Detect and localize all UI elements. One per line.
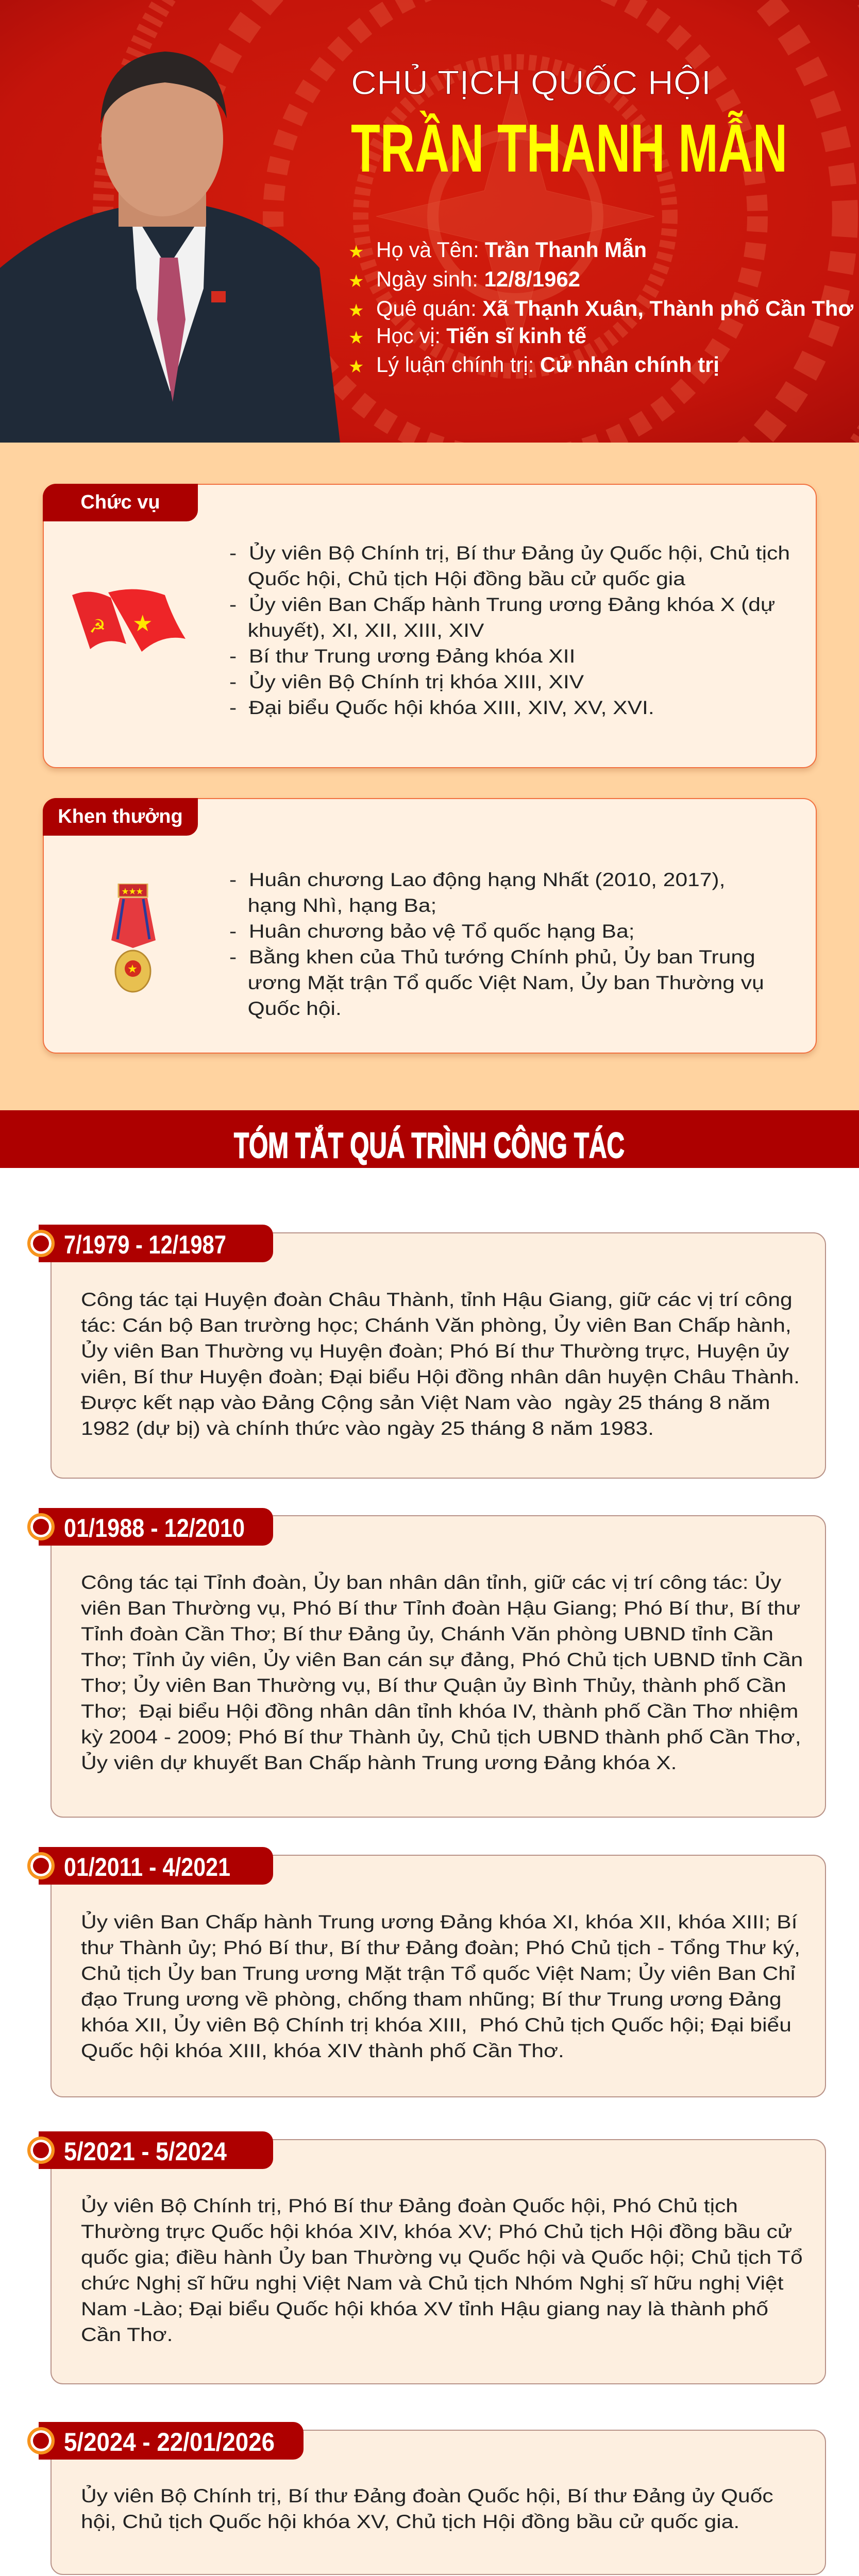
card: 5/2021 - 5/2024: quốc gia; điều hành Ủy ban Thường vụ Quốc hội và Quốc hội; Chủ tịch Tổ bbox=[81, 2247, 803, 2268]
card: 7/1979 - 12/1987: 7/1979 - 12/1987 bbox=[64, 1230, 226, 1259]
info list with stars: Ngày sinh: 12/8/1962 bbox=[376, 267, 580, 291]
card: 5/2024 - 22/01/2026: 5/2024 - 22/01/2026 bbox=[64, 2428, 275, 2456]
list: khen thưởng: hạng Nhì, hạng Ba; bbox=[248, 895, 436, 916]
section heading banner bbox=[0, 1110, 859, 1168]
card: 01/2011 - 4/2021: Ủy viên Ban Chấp hành Trung ương Đảng khóa XI, khóa XII, khóa XIII; Bí bbox=[81, 1911, 797, 1933]
list: khen thưởng: - Huân chương bảo vệ Tổ quốc hạng Ba; bbox=[229, 921, 635, 942]
icon: flags: ☭ bbox=[89, 616, 106, 637]
card: 01/1988 - 12/2010: viên Ban Thường vụ, Phó Bí thư Tỉnh đoàn Hậu Giang; Phó Bí thư, Bí thư bbox=[81, 1598, 800, 1619]
card: 7/1979 - 12/1987: viên, Bí thư Huyện đoàn; Đại biểu Hội đồng nhân dân huyện Châu Thành. bbox=[81, 1366, 800, 1387]
list: chức vụ: - Ủy viên Ban Chấp hành Trung ương Đảng khóa X (dự bbox=[229, 594, 775, 615]
portrait bbox=[0, 52, 340, 443]
tab: chức vụ bbox=[43, 484, 198, 521]
icon: flags: ★ bbox=[132, 611, 153, 637]
card: 5/2021 - 5/2024: chức Nghị sĩ hữu nghị Việt Nam và Chủ tịch Nhóm Nghị sĩ hữu nghị Việt bbox=[81, 2273, 783, 2294]
tab: khen thưởng bbox=[43, 798, 198, 836]
card: 5/2021 - 5/2024: Ủy viên Bộ Chính trị, Phó Bí thư Đảng đoàn Quốc hội, Phó Chủ tịch bbox=[81, 2195, 738, 2216]
list: chức vụ: - Ủy viên Bộ Chính trị, Bí thư Đảng ủy Quốc hội, Chủ tịch bbox=[229, 543, 790, 564]
card: 01/1988 - 12/2010: Ủy viên dự khuyết Ban Chấp hành Trung ương Đảng khóa X. bbox=[81, 1752, 677, 1773]
card: 01/2011 - 4/2021: khóa XII, Ủy viên Bộ Chính trị khóa XIII, Phó Chủ tịch Quốc hội; Đại biểu bbox=[81, 2014, 791, 2036]
info list with stars: Học vị: Tiến sĩ kinh tế bbox=[376, 324, 587, 348]
list: khen thưởng: - Huân chương Lao động hạng Nhất (2010, 2017), bbox=[229, 869, 725, 890]
card: 01/1988 - 12/2010: Tỉnh đoàn Cần Thơ; Bí thư Đảng ủy, Chánh Văn phòng UBND tỉnh Cần bbox=[81, 1623, 773, 1645]
list: chức vụ: - Đại biểu Quốc hội khóa XIII, XIV, XV, XVI. bbox=[229, 697, 654, 718]
info list with stars: ★ bbox=[348, 242, 364, 262]
info list with stars: ★ bbox=[348, 357, 364, 377]
card: 01/2011 - 4/2021: đạo Trung ương về phòng, chống tham nhũng; Bí thư Trung ương Đảng bbox=[81, 1989, 782, 2010]
info list with stars: Quê quán: Xã Thạnh Xuân, Thành phố Cần Thơ bbox=[376, 296, 853, 320]
icon: medal bbox=[111, 884, 156, 992]
list: chức vụ bbox=[229, 542, 790, 718]
card: 01/1988 - 12/2010 bbox=[27, 1508, 826, 1818]
icon: medal: ★ bbox=[128, 964, 137, 974]
panel: chức vụ bbox=[43, 484, 817, 768]
card: 01/2011 - 4/2021 bbox=[27, 1847, 826, 2097]
info list with stars: ★ bbox=[348, 301, 364, 320]
card: 5/2021 - 5/2024: Thường trực Quốc hội khóa XIV, khóa XV; Phó Chủ tịch Hội đồng bầu cử bbox=[81, 2221, 792, 2242]
card: 5/2021 - 5/2024 bbox=[27, 2131, 826, 2384]
card: 01/2011 - 4/2021: thư Thành ủy; Phó Bí thư, Bí thư Đảng đoàn; Phó Chủ tịch - Tổng Thư ký, bbox=[81, 1937, 800, 1958]
icon: medal: ★★★ bbox=[122, 887, 143, 895]
card: 5/2021 - 5/2024: Cần Thơ. bbox=[81, 2324, 173, 2345]
panel: khen thưởng bbox=[43, 798, 817, 1054]
list: khen thưởng bbox=[229, 869, 764, 1019]
card: 01/2011 - 4/2021: Quốc hội khóa XIII, khóa XIV thành phố Cần Thơ. bbox=[81, 2040, 564, 2061]
card: 01/1988 - 12/2010: Thơ; Tỉnh ủy viên, Ủy viên Ban cán sự đảng, Phó Chủ tịch UBND tỉnh Cần bbox=[81, 1649, 803, 1670]
list: chức vụ: - Bí thư Trung ương Đảng khóa XII bbox=[229, 646, 575, 667]
section heading banner: TÓM TẮT QUÁ TRÌNH CÔNG TÁC bbox=[234, 1125, 625, 1165]
card: 7/1979 - 12/1987: tác: Cán bộ Ban trường học; Chánh Văn phòng, Ủy viên Ban Chấp hành, bbox=[81, 1315, 791, 1336]
list: chức vụ: khuyết), XI, XII, XIII, XIV bbox=[248, 620, 484, 641]
icon: flags bbox=[72, 589, 186, 652]
card: 7/1979 - 12/1987: Công tác tại Huyện đoàn Châu Thành, tỉnh Hậu Giang, giữ các vị trí công bbox=[81, 1289, 793, 1310]
info list with stars: ★ bbox=[348, 328, 364, 348]
card: 5/2024 - 22/01/2026: Ủy viên Bộ Chính trị, Bí thư Đảng đoàn Quốc hội, Bí thư Đảng ủy Quốc bbox=[81, 2485, 773, 2506]
card: 5/2024 - 22/01/2026: hội, Chủ tịch Quốc hội khóa XV, Chủ tịch Hội đồng bầu cử quốc gia. bbox=[81, 2511, 739, 2532]
list: chức vụ: - Ủy viên Bộ Chính trị khóa XIII, XIV bbox=[229, 671, 584, 692]
card: 01/2011 - 4/2021: Chủ tịch Ủy ban Trung ương Mặt trận Tổ quốc Việt Nam; Ủy viên Ban Chỉ bbox=[81, 1963, 795, 1984]
header banner bbox=[0, 0, 859, 443]
info list with stars bbox=[348, 237, 853, 377]
info list with stars: Họ và Tên: Trần Thanh Mẫn bbox=[376, 237, 647, 262]
list: khen thưởng: ương Mặt trận Tổ quốc Việt Nam, Ủy ban Thường vụ bbox=[248, 972, 764, 993]
tab: chức vụ: Chức vụ bbox=[80, 492, 160, 513]
card: 5/2021 - 5/2024: Nam -Lào; Đại biểu Quốc hội khóa XV tỉnh Hậu giang nay là thành phố bbox=[81, 2298, 768, 2319]
list: khen thưởng: - Bằng khen của Thủ tướng Chính phủ, Ủy ban Trung bbox=[229, 946, 755, 968]
card: 01/1988 - 12/2010: kỳ 2004 - 2009; Phó Bí thư Thành ủy, Chủ tịch UBND thành phố Cần Thơ, bbox=[81, 1726, 801, 1748]
info list with stars: Lý luận chính trị: Cử nhân chính trị bbox=[376, 352, 719, 377]
card: 5/2024 - 22/01/2026 bbox=[27, 2422, 826, 2575]
card: 7/1979 - 12/1987: 1982 (dự bị) và chính thức vào ngày 25 tháng 8 năm 1983. bbox=[81, 1418, 654, 1439]
title: Chủ tịch Quốc hội bbox=[351, 63, 787, 186]
card: 01/2011 - 4/2021: 01/2011 - 4/2021 bbox=[64, 1853, 230, 1882]
title: Chủ tịch Quốc hội: CHỦ TỊCH QUỐC HỘI bbox=[351, 63, 711, 101]
card: 5/2021 - 5/2024: 5/2021 - 5/2024 bbox=[64, 2137, 227, 2166]
list: chức vụ: Quốc hội, Chủ tịch Hội đồng bầu cử quốc gia bbox=[248, 568, 685, 589]
info list with stars: ★ bbox=[348, 272, 364, 291]
tab: khen thưởng: Khen thưởng bbox=[58, 806, 183, 827]
card: 01/1988 - 12/2010: Thơ; Ủy viên Ban Thường vụ, Bí thư Quận ủy Bình Thủy, thành phố Cần bbox=[81, 1675, 786, 1696]
card: 01/1988 - 12/2010: Thơ; Đại biểu Hội đồng nhân dân tỉnh khóa IV, thành phố Cần Thơ nhiệm bbox=[81, 1701, 798, 1722]
card: 7/1979 - 12/1987 bbox=[27, 1225, 826, 1479]
card: 01/1988 - 12/2010: 01/1988 - 12/2010 bbox=[64, 1514, 245, 1543]
list: khen thưởng: Quốc hội. bbox=[248, 998, 342, 1019]
card: 7/1979 - 12/1987: Được kết nạp vào Đảng Cộng sản Việt Nam vào ngày 25 tháng 8 năm bbox=[81, 1392, 770, 1413]
card: 01/1988 - 12/2010: Công tác tại Tỉnh đoàn, Ủy ban nhân dân tỉnh, giữ các vị trí công tác: Ủy bbox=[81, 1572, 781, 1593]
card: 7/1979 - 12/1987: Ủy viên Ban Thường vụ Huyện đoàn; Phó Bí thư Thường trực, Huyện ủy bbox=[81, 1341, 789, 1362]
